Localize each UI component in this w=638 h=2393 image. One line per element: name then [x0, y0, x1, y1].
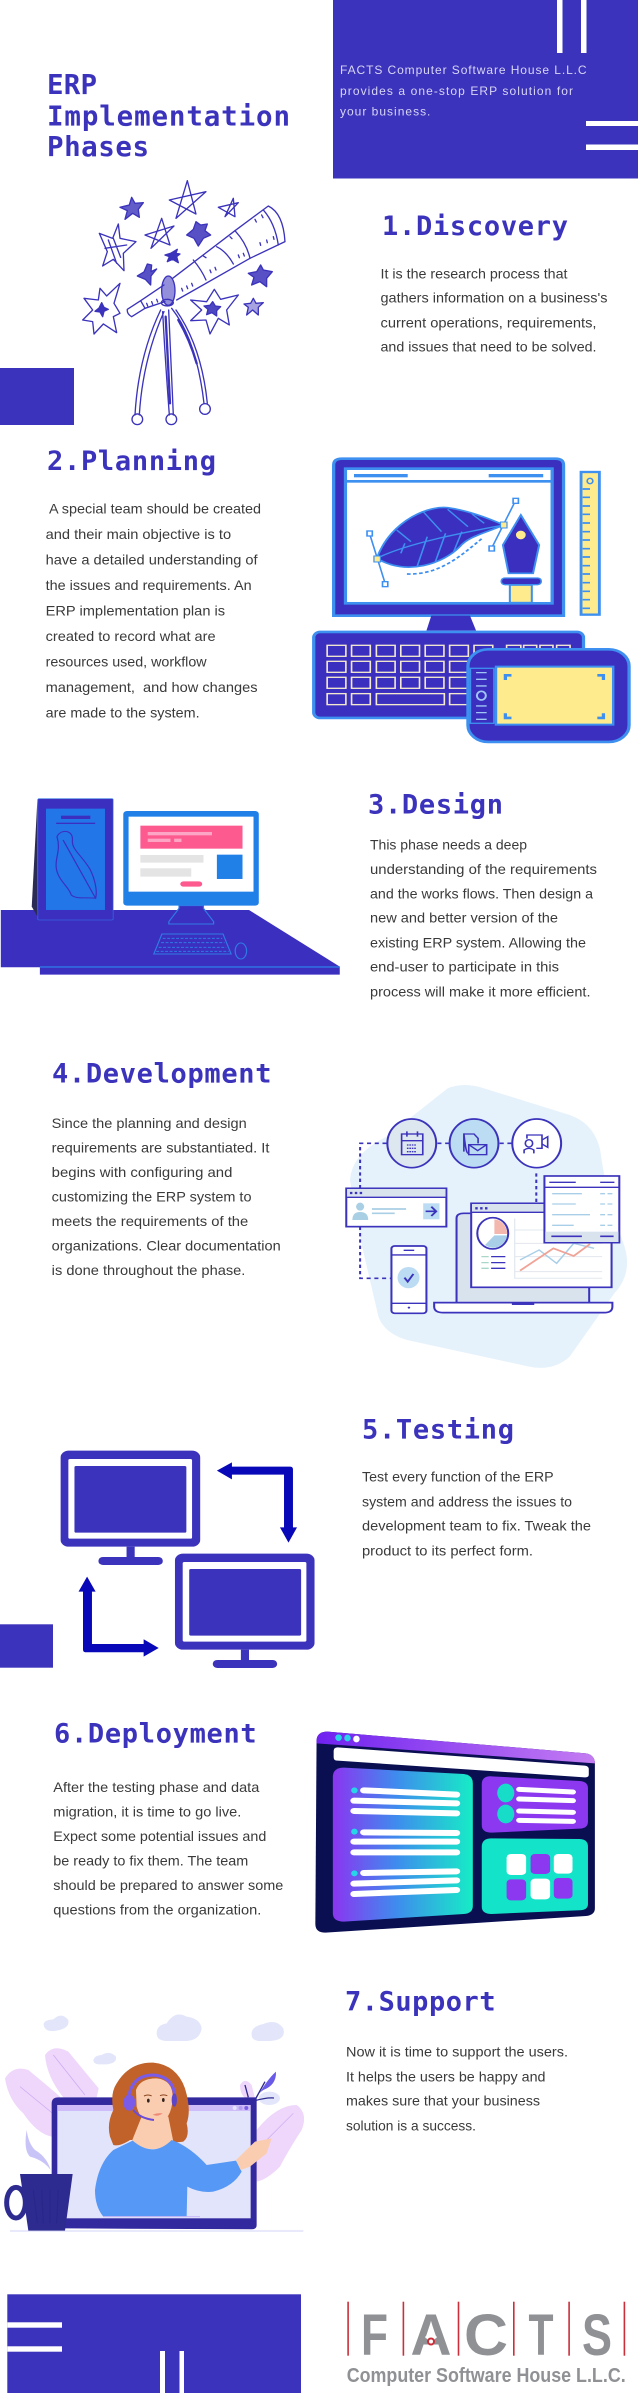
icon: development systems illustration	[346, 1085, 627, 1368]
desk	[1, 910, 340, 975]
section: 6 deployment	[53, 1718, 284, 1918]
heading: 3.Design	[368, 789, 503, 820]
text block: should be prepared to answer some	[53, 1877, 284, 1893]
text block: customizing the ERP system to	[52, 1189, 252, 1205]
heading: 6.Deployment	[54, 1718, 257, 1749]
text block: new and better version of the	[370, 910, 558, 926]
text block: ERP implementation plan is	[46, 603, 225, 619]
title: ERP	[47, 69, 97, 101]
text block: is done throughout the phase.	[52, 1262, 245, 1278]
leaves	[5, 2048, 304, 2182]
logo: FACTS: A	[410, 2303, 452, 2368]
text block: It helps the users be happy and	[346, 2068, 546, 2084]
keyboard	[314, 632, 583, 718]
intro text: provides a one-stop ERP solution for	[340, 84, 573, 98]
icon: design desk scene	[1, 798, 340, 975]
monitor top	[61, 1451, 200, 1565]
text block: organizations. Clear documentation	[52, 1238, 281, 1254]
title: Phases	[47, 131, 149, 163]
ground	[10, 2230, 303, 2232]
mug	[7, 2174, 73, 2231]
monitor stand	[426, 616, 476, 631]
text block: makes sure that your business	[346, 2093, 540, 2109]
text block: process will make it more efficient.	[370, 983, 590, 999]
text block	[53, 1779, 284, 1918]
text block: questions from the organization.	[53, 1902, 261, 1918]
icon: telescope and stars	[83, 181, 285, 425]
text block: system and address the issues to	[362, 1493, 572, 1509]
text block: resources used, workflow	[46, 654, 208, 670]
text block: solution is a success.	[346, 2117, 476, 2133]
section: 3 design	[368, 789, 597, 999]
text block: and the works flows. Then design a	[370, 885, 593, 901]
title: Implementation	[47, 100, 290, 132]
text block: Test every function of the ERP	[362, 1469, 554, 1485]
icon: testing monitors with arrows	[61, 1451, 315, 1668]
clouds	[44, 2014, 284, 2064]
laptop	[52, 2097, 257, 2229]
logo: FACTS	[347, 2302, 626, 2387]
logo: FACTS: T	[528, 2303, 554, 2368]
heading: 5.Testing	[362, 1414, 514, 1445]
panel: intro	[333, 0, 638, 178]
circle icons	[387, 1119, 561, 1168]
logo: FACTS: S	[582, 2303, 612, 2368]
left panel	[333, 1768, 473, 1922]
monitor bottom	[175, 1554, 315, 1668]
text block	[346, 2044, 568, 2133]
plant sprig	[245, 2072, 280, 2105]
right top panel	[482, 1776, 588, 1833]
text block: existing ERP system. Allowing the	[370, 934, 586, 950]
section: 2 planning	[46, 446, 261, 721]
text block: development team to fix. Tweak the	[362, 1518, 591, 1534]
text block	[362, 1469, 591, 1558]
text block: current operations, requirements,	[380, 314, 596, 330]
window frame	[315, 1732, 595, 1933]
icon: support agent on laptop	[5, 2014, 304, 2232]
connectors	[360, 1143, 536, 1278]
section: 4 development	[52, 1058, 281, 1278]
drawing tablet	[468, 649, 629, 742]
text block: Now it is time to support the users.	[346, 2044, 568, 2060]
accent square	[0, 1624, 53, 1668]
text block: requirements are substantiated. It	[52, 1140, 270, 1156]
text block: meets the requirements of the	[52, 1213, 249, 1229]
section: 5 testing	[362, 1414, 591, 1558]
text block: This phase needs a deep	[370, 836, 527, 852]
arrow bottom left	[79, 1577, 159, 1657]
text block: Since the planning and design	[52, 1115, 247, 1131]
text block: begins with configuring and	[52, 1164, 232, 1180]
text block: the issues and requirements. An	[46, 577, 252, 593]
profile card	[346, 1188, 446, 1227]
text block: have a detailed understanding of	[46, 551, 258, 567]
data window	[544, 1176, 619, 1243]
intro text: FACTS Computer Software House L.L.C	[340, 63, 587, 77]
text block	[370, 836, 597, 999]
logo: FACTS: F	[361, 2303, 388, 2368]
heading: 1.Discovery	[382, 211, 568, 242]
panel: footer band	[7, 2294, 301, 2393]
address bar	[334, 1747, 589, 1777]
heading: 2.Planning	[47, 446, 216, 477]
accent square	[0, 368, 74, 425]
intro text	[340, 63, 587, 118]
icon: deployment app window	[315, 1732, 595, 1933]
phone	[391, 1246, 426, 1313]
section: 7 support	[345, 1987, 568, 2133]
laptop	[434, 1203, 612, 1313]
keyboard and mouse	[154, 934, 247, 959]
text block: are made to the system.	[46, 705, 200, 721]
text block: migration, it is time to go live.	[53, 1804, 241, 1820]
text block: end-user to participate in this	[370, 959, 559, 975]
text block: created to record what are	[46, 628, 216, 644]
small plant	[26, 2130, 51, 2170]
background blob	[350, 1085, 627, 1368]
right bottom panel	[482, 1838, 588, 1914]
text block: and issues that need to be solved.	[380, 339, 596, 355]
ruler	[581, 472, 599, 615]
text block	[380, 265, 608, 355]
logo: FACTS: C	[464, 2303, 508, 2368]
text block: be ready to fix them. The team	[53, 1853, 248, 1869]
arrow top right	[217, 1462, 297, 1543]
book	[32, 798, 113, 920]
text block: management, and how changes	[46, 679, 258, 695]
text block: understanding of the requirements	[370, 861, 597, 877]
text block: and their main objective is to	[46, 526, 231, 542]
monitor	[334, 459, 564, 616]
text block: It is the research process that	[380, 265, 568, 281]
heading: 7.Support	[345, 1987, 496, 2018]
text block	[52, 1115, 281, 1278]
title bar	[317, 1732, 595, 1763]
intro text: your business.	[340, 104, 430, 118]
text block: After the testing phase and data	[53, 1779, 260, 1795]
title	[47, 69, 290, 163]
heading: 4.Development	[52, 1058, 272, 1089]
text block: product to its perfect form.	[362, 1542, 533, 1558]
text block: gathers information on a business's	[380, 290, 608, 306]
monitor	[123, 811, 259, 924]
text block: A special team should be created	[49, 500, 261, 516]
agent	[95, 2063, 272, 2217]
text block	[46, 500, 261, 721]
text block: Expect some potential issues and	[53, 1828, 266, 1844]
icon: design workstation	[314, 459, 629, 742]
section: 1 discovery	[380, 211, 608, 355]
